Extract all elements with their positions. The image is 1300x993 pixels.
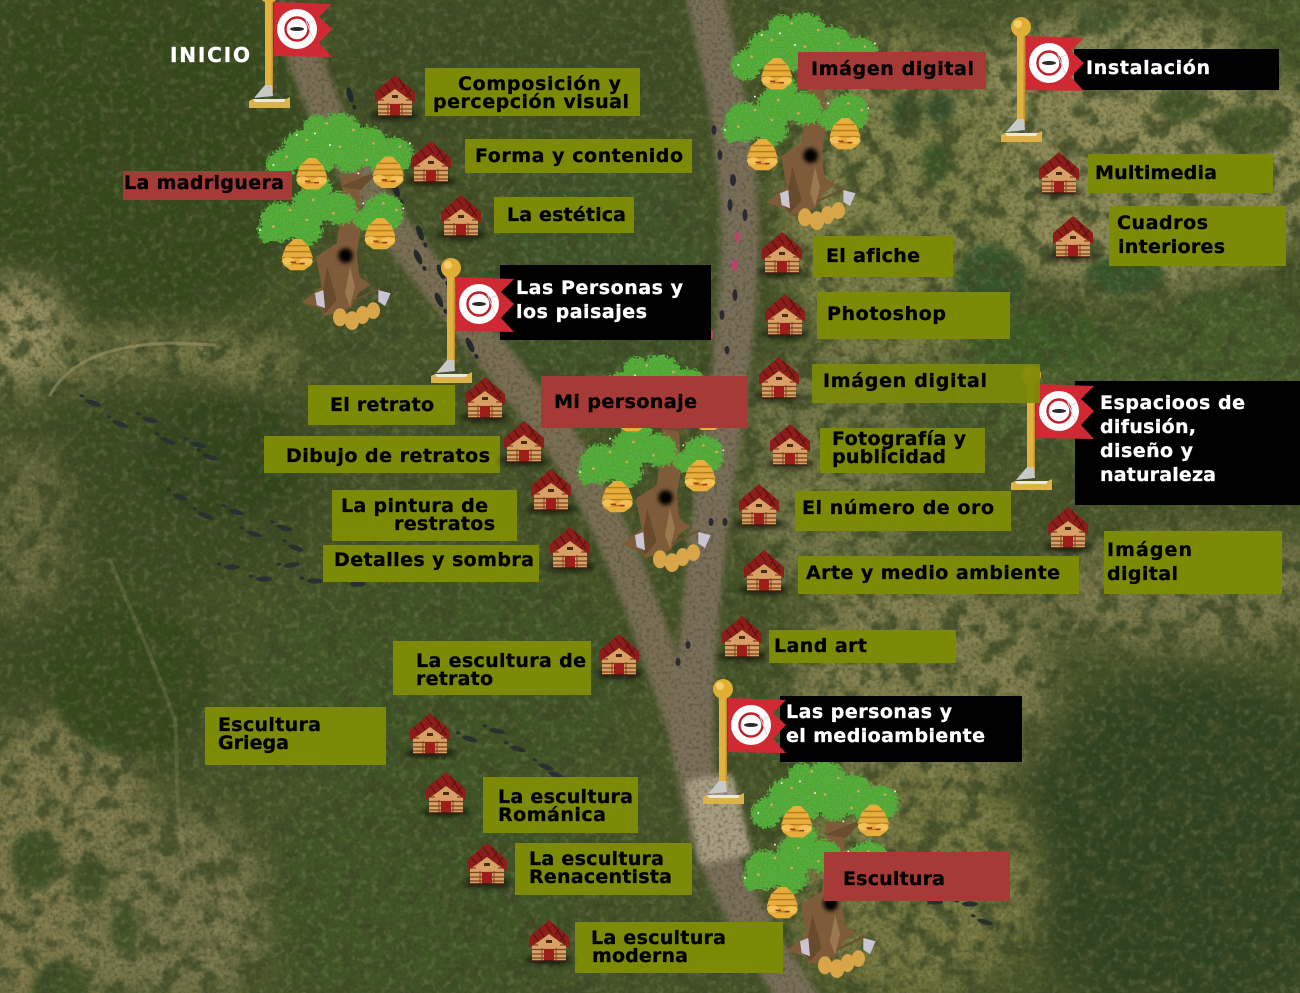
label: La escultura moderna: moderna (592, 945, 688, 967)
tree: Escultura (743, 761, 898, 978)
flag: las personas y el medioambiente (703, 679, 786, 804)
black heading: Las Personas y los paisajes: los paisajes (516, 301, 647, 323)
black heading: Instalación: Instalación (1086, 57, 1210, 79)
label: Forma y contenido: Forma y contenido (475, 145, 683, 167)
label: El afiche (813, 236, 953, 277)
label: Arte y medio ambiente: Arte y medio ambiente (806, 562, 1060, 584)
label: Escultura Griega: Griega (218, 732, 289, 754)
icon: house Pintura (526, 469, 576, 514)
black heading: Las Personas y los paisajes: Las Personas y (516, 277, 684, 299)
flag: inicio (249, 0, 332, 108)
label: Escultura Griega: Escultura (218, 714, 321, 736)
icon: house Detalles (545, 527, 595, 572)
label: Imágen digital (812, 364, 1040, 403)
label: Imágen digital: Imágen digital (823, 370, 987, 392)
flag: espacios de difusión (1011, 365, 1094, 490)
icon: house Multimedia (1034, 152, 1084, 197)
label: La escultura moderna (575, 922, 783, 973)
icon: house Renacentista (462, 843, 512, 888)
footprints: left forest trails (78, 393, 366, 587)
icon: house Imágen digital (754, 357, 804, 402)
label: El afiche: El afiche (826, 245, 920, 267)
label: El número de oro (795, 491, 1011, 531)
icon: house Moderna (524, 920, 574, 965)
people walking on the road (676, 125, 748, 666)
icon: house Imágen digital right (1043, 507, 1093, 552)
label: La escultura moderna: La escultura (591, 927, 726, 949)
tree: La madriguera (258, 113, 413, 330)
icon: house Griega (405, 713, 455, 758)
label: La escultura Románica: Románica (498, 804, 606, 826)
black heading: Espacioos de difusión, diseño y naturaleza: naturaleza (1100, 464, 1216, 486)
tree: Imágen digital (723, 13, 878, 230)
label: La escultura de retrato (393, 641, 591, 695)
icon: house Fotografía (765, 424, 815, 469)
label: Dibujo de retratos (264, 436, 500, 473)
flag: las personas y los paisajes (431, 258, 514, 383)
label: La escultura de retrato: La escultura de (416, 650, 586, 672)
black heading: Espacioos de difusión, diseño y naturaleza: Espacioos de (1100, 392, 1245, 414)
footprints: lower forest trail (454, 724, 994, 927)
label: La estética: La estética (507, 204, 626, 226)
label: Cuadros interiores (1109, 206, 1286, 266)
black heading: Espacioos de difusión, diseño y naturaleza: difusión, (1100, 416, 1196, 438)
icon: house Retrato (460, 377, 510, 422)
label: Forma y contenido (465, 139, 692, 173)
icon: house Estética (436, 195, 486, 240)
red heading: Escultura: Escultura (843, 868, 945, 890)
label: Dibujo de retratos: Dibujo de retratos (286, 445, 490, 467)
label: Arte y medio ambiente (798, 556, 1079, 594)
red heading: Escultura (824, 852, 1010, 901)
label: Cuadros interiores: interiores (1118, 236, 1225, 258)
tree: Mi personaje (578, 355, 733, 572)
icon: house Afiche (757, 232, 807, 277)
label: El retrato: El retrato (330, 394, 434, 416)
icon: house Escultura de retrato (594, 634, 644, 679)
label: Imágen digital right (1104, 531, 1282, 594)
label: Fotografía y publicidad: Fotografía y (832, 428, 967, 450)
black heading: Instalación (1074, 49, 1279, 90)
black heading: Espacioos de difusión, diseño y naturaleza: diseño y (1100, 440, 1194, 462)
label: Fotografía y publicidad (820, 428, 985, 473)
footprints: upper path (345, 86, 479, 360)
red heading: Mi personaje: Mi personaje (554, 391, 697, 413)
label: La escultura Renacentista (515, 843, 692, 895)
icon: house Número de oro (734, 484, 784, 529)
label: Photoshop: Photoshop (827, 303, 946, 325)
label: La pintura de restratos: restratos (394, 513, 495, 535)
flag: instalación (1001, 17, 1084, 142)
red heading: La madriguera: La madriguera (124, 172, 284, 194)
label: Cuadros interiores: Cuadros (1117, 212, 1208, 234)
icon: house Románica (421, 772, 471, 817)
start label: INICIO (170, 43, 250, 67)
black heading: Las Personas y los paisajes (500, 265, 711, 340)
icon: house Dibujo (499, 421, 549, 466)
label: La escultura Románica: La escultura (498, 786, 633, 808)
black heading: Espacioos de difusión, diseño y naturaleza (1075, 381, 1300, 505)
red heading: Mi personaje (541, 376, 748, 428)
label: Detalles y sombra (323, 545, 539, 582)
label: Detalles y sombra: Detalles y sombra (334, 549, 534, 571)
label: Photoshop (817, 292, 1010, 339)
label: Land art (769, 630, 956, 663)
label: El número de oro: El número de oro (802, 497, 994, 519)
label: La pintura de restratos (332, 490, 517, 541)
label: Multimedia (1088, 154, 1273, 193)
red heading: Imágen digital (798, 52, 986, 89)
label: La escultura Renacentista: Renacentista (529, 866, 672, 888)
label: Composición y percepción visual: percepción visual (433, 91, 629, 113)
label: Multimedia: Multimedia (1095, 162, 1217, 184)
icon: house Land art (717, 616, 767, 661)
label: La pintura de restratos: La pintura de (341, 495, 488, 517)
red heading: Imágen digital: Imágen digital (811, 58, 974, 80)
label: La escultura Renacentista: La escultura (529, 848, 664, 870)
label: Imágen digital right: digital (1107, 563, 1178, 585)
label: Composición y percepción visual (425, 68, 640, 116)
label: Land art: Land art (774, 635, 867, 657)
label: El retrato (308, 385, 455, 425)
black heading: Las personas y el medioambiente: Las personas y (786, 701, 953, 723)
black heading: Las personas y el medioambiente (780, 696, 1022, 762)
icon: house Arte (739, 550, 789, 595)
icon: house Cuadros (1048, 216, 1098, 261)
icon: house Composición (370, 75, 420, 120)
label: Escultura Griega (205, 707, 386, 765)
label: La escultura de retrato: retrato (416, 668, 493, 690)
label: La estética (494, 197, 634, 233)
label: Composición y percepción visual: Composición y (458, 73, 622, 95)
label: Imágen digital right: Imágen (1107, 539, 1192, 561)
label: La escultura Románica (483, 777, 638, 833)
label: Fotografía y publicidad: publicidad (832, 446, 946, 468)
black heading: Las personas y el medioambiente: el medioambiente (786, 725, 985, 747)
icon: house Forma (406, 141, 456, 186)
icon: house Photoshop (760, 294, 810, 339)
